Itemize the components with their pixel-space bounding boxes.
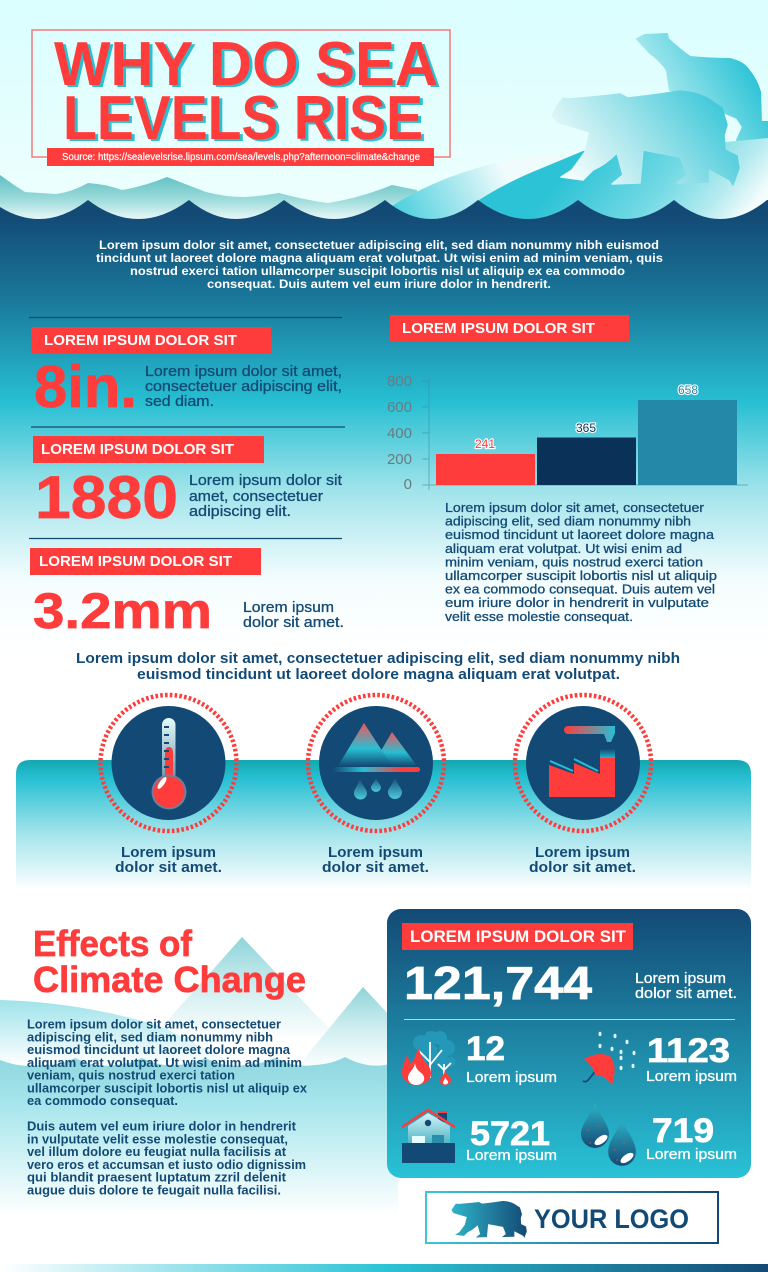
bar chart: 400	[387, 425, 412, 442]
effects body text: qui blandit praesent luptatum zzril delenit	[27, 1170, 287, 1184]
caption: mountains: dolor sit amet.	[322, 860, 429, 876]
effects body text: ea commodo consequat.	[27, 1094, 178, 1108]
bar chart: 200	[387, 451, 412, 468]
stat: 1880: adipiscing elit.	[189, 504, 291, 520]
chart heading: LOREM IPSUM DOLOR SIT	[402, 320, 595, 337]
chart heading	[390, 315, 629, 342]
intro text	[96, 238, 663, 291]
stat: 8in: 8in.	[34, 354, 137, 420]
effects heading: Climate Change	[33, 959, 306, 1000]
caption: mountains: Lorem ipsum	[328, 845, 423, 861]
icon: flooded house	[402, 1110, 455, 1163]
chart description: velit esse molestie consequat.	[445, 609, 633, 624]
icon: logo bear	[451, 1201, 527, 1238]
effects body text: veniam, quis nostrud exerci tation	[27, 1068, 235, 1082]
icon: factory	[515, 695, 651, 831]
effects body text	[27, 1018, 307, 1198]
title shadow: LEVELS RISE	[66, 86, 426, 155]
effects body text: aliquam erat volutpat. Ut wisi enim ad minim	[27, 1056, 302, 1070]
middle heading: Lorem ipsum dolor sit amet, consectetuer adipiscing elit, sed diam nonummy nibh	[76, 651, 680, 667]
stat: 12	[466, 1030, 557, 1086]
stat: 1880: LOREM IPSUM DOLOR SIT	[41, 441, 234, 458]
title text	[54, 30, 438, 153]
teal band	[16, 760, 751, 890]
icon: wildfire	[402, 1031, 456, 1085]
stat: 12: Lorem ipsum	[466, 1070, 557, 1086]
polar bear: front	[552, 91, 739, 185]
stat: 1880	[31, 427, 345, 531]
title shadow	[57, 32, 441, 155]
caption: mountains	[322, 845, 429, 876]
stat: 1123: Lorem ipsum	[646, 1069, 737, 1085]
source bar	[47, 148, 434, 166]
icon: thermometer	[100, 695, 236, 831]
intro text: nostrud exerci tation ullamcorper suscipit lobortis nisl ut aliquip ex ea commodo	[130, 264, 625, 278]
caption: thermometer	[115, 845, 222, 876]
intro text: tincidunt ut laoreet dolore magna aliquam erat volutpat. Ut wisi enim ad minim veniam, quis	[96, 251, 663, 265]
stat: 3.2mm: dolor sit amet.	[243, 615, 344, 631]
effects body text: vero eros et accumsan et iusto odio dignissim	[27, 1158, 306, 1172]
stat: 3.2mm: Lorem ipsum	[243, 600, 334, 616]
icon: umbrella and rain	[583, 1032, 636, 1085]
bar chart: 365	[576, 421, 596, 435]
stat: 3.2mm	[29, 538, 344, 639]
stat: 1880: Lorem ipsum dolor sit	[189, 473, 342, 489]
effects heading	[33, 923, 306, 1000]
caption: thermometer: Lorem ipsum	[121, 845, 216, 861]
polar bear: back	[637, 34, 768, 145]
stat: 8in: sed diam.	[145, 394, 214, 410]
caption: factory: dolor sit amet.	[529, 860, 636, 876]
stat: 3.2mm: LOREM IPSUM DOLOR SIT	[39, 553, 232, 570]
middle heading: euismod tincidunt ut laoreet dolore magna aliquam erat volutpat.	[137, 667, 620, 683]
effects heading: Effects of	[33, 923, 193, 964]
sea background with scalloped waves	[0, 200, 768, 660]
footer bar	[0, 1264, 768, 1272]
stat: 3.2mm: 3.2mm	[33, 583, 212, 639]
stat: 1123	[646, 1032, 737, 1085]
source bar: Source: https://sealevelsrise.lipsum.com/sea/levels.php?afternoon=climate&change	[62, 152, 420, 163]
chart description: euismod tincidunt ut laoreet dolore magna	[445, 527, 715, 542]
title shadow: WHY DO SEA	[57, 32, 441, 101]
ice swoosh	[392, 150, 590, 225]
middle heading	[76, 651, 680, 683]
chart description: eum iriure dolor in hendrerit in vulputate	[445, 595, 709, 610]
lower left wave	[0, 1000, 240, 1066]
stat: 8in: consectetuer adipiscing elit,	[145, 379, 342, 395]
stat: 12: 12	[466, 1030, 505, 1068]
bar chart: 0	[404, 476, 412, 493]
chart description: adipiscing elit, sed diam nonummy nibh	[445, 514, 691, 529]
stat: 1123: 1123	[647, 1032, 730, 1070]
chart description	[445, 500, 717, 624]
main figure caption	[635, 971, 737, 1002]
lower sea	[0, 1057, 398, 1215]
effects body text: augue duis dolore te feugait nulla facilisi.	[27, 1184, 281, 1198]
caption: factory	[529, 845, 636, 876]
stat: 8in: Lorem ipsum dolor sit amet,	[145, 364, 342, 380]
title block	[32, 30, 450, 157]
title text: LEVELS RISE	[63, 84, 423, 153]
sky background	[0, 0, 768, 225]
stat: 8in	[29, 318, 342, 420]
distant waves	[0, 175, 420, 225]
logo box	[426, 1192, 718, 1243]
stat: 5721: Lorem ipsum	[466, 1148, 557, 1164]
effects body text: in vulputate velit esse molestie consequat,	[27, 1132, 288, 1146]
effects body text: ullamcorper suscipit lobortis nisl ut aliquip ex	[27, 1082, 307, 1096]
stat: 719: Lorem ipsum	[646, 1147, 737, 1163]
logo text: YOUR LOGO	[534, 1204, 689, 1234]
caption: thermometer: dolor sit amet.	[115, 860, 222, 876]
caption: factory: Lorem ipsum	[535, 845, 630, 861]
stat: 5721: 5721	[470, 1115, 550, 1153]
effects body text: vel illum dolore eu feugiat nulla facilisis at	[27, 1145, 287, 1159]
chart description: minim veniam, quis nostrud exerci tation	[445, 554, 703, 569]
ice floe	[476, 138, 768, 225]
chart description: Lorem ipsum dolor sit amet, consectetuer	[445, 500, 705, 515]
title text: WHY DO SEA	[54, 30, 438, 99]
intro text: Lorem ipsum dolor sit amet, consectetuer adipiscing elit, sed diam nonummy nibh euismod	[99, 238, 659, 252]
stat: 719	[646, 1112, 737, 1163]
bar chart: 241	[475, 437, 495, 451]
main figure: 121,744	[404, 957, 592, 1009]
effects body text: Lorem ipsum dolor sit amet, consectetuer	[27, 1018, 281, 1032]
mountains backdrop	[150, 937, 440, 1070]
stat: 719: 719	[652, 1112, 714, 1150]
bar chart	[387, 373, 748, 493]
stat: 5721	[466, 1115, 557, 1164]
icon: water drops	[581, 1102, 636, 1166]
panel: statistics	[387, 909, 751, 1178]
effects body text: adipiscing elit, sed diam nonummy nibh	[27, 1030, 273, 1044]
panel heading	[402, 923, 633, 950]
icon: melting mountains	[308, 695, 444, 831]
stat: 1880: 1880	[35, 464, 178, 531]
effects body text: Duis autem vel eum iriure dolor in hendrerit	[27, 1120, 297, 1134]
bar chart: 658	[678, 383, 698, 397]
main figure caption: Lorem ipsum	[635, 971, 726, 987]
chart description: ex ea commodo consequat. Duis autem vel	[445, 582, 715, 597]
bar chart: 800	[387, 373, 412, 390]
stat: 8in: LOREM IPSUM DOLOR SIT	[44, 332, 237, 349]
main figure caption: dolor sit amet.	[635, 986, 737, 1002]
intro text: consequat. Duis autem vel eum iriure dolor in hendrerit.	[207, 277, 551, 291]
chart description: aliquam erat volutpat. Ut wisi enim ad	[445, 541, 682, 556]
effects body text: euismod tincidunt ut laoreet dolore magna	[27, 1043, 291, 1057]
panel heading: LOREM IPSUM DOLOR SIT	[410, 927, 627, 946]
bar chart: 600	[387, 399, 412, 416]
chart description: ullamcorper suscipit lobortis nisl ut aliquip	[445, 568, 717, 583]
stat: 1880: amet, consectetuer	[189, 489, 323, 505]
